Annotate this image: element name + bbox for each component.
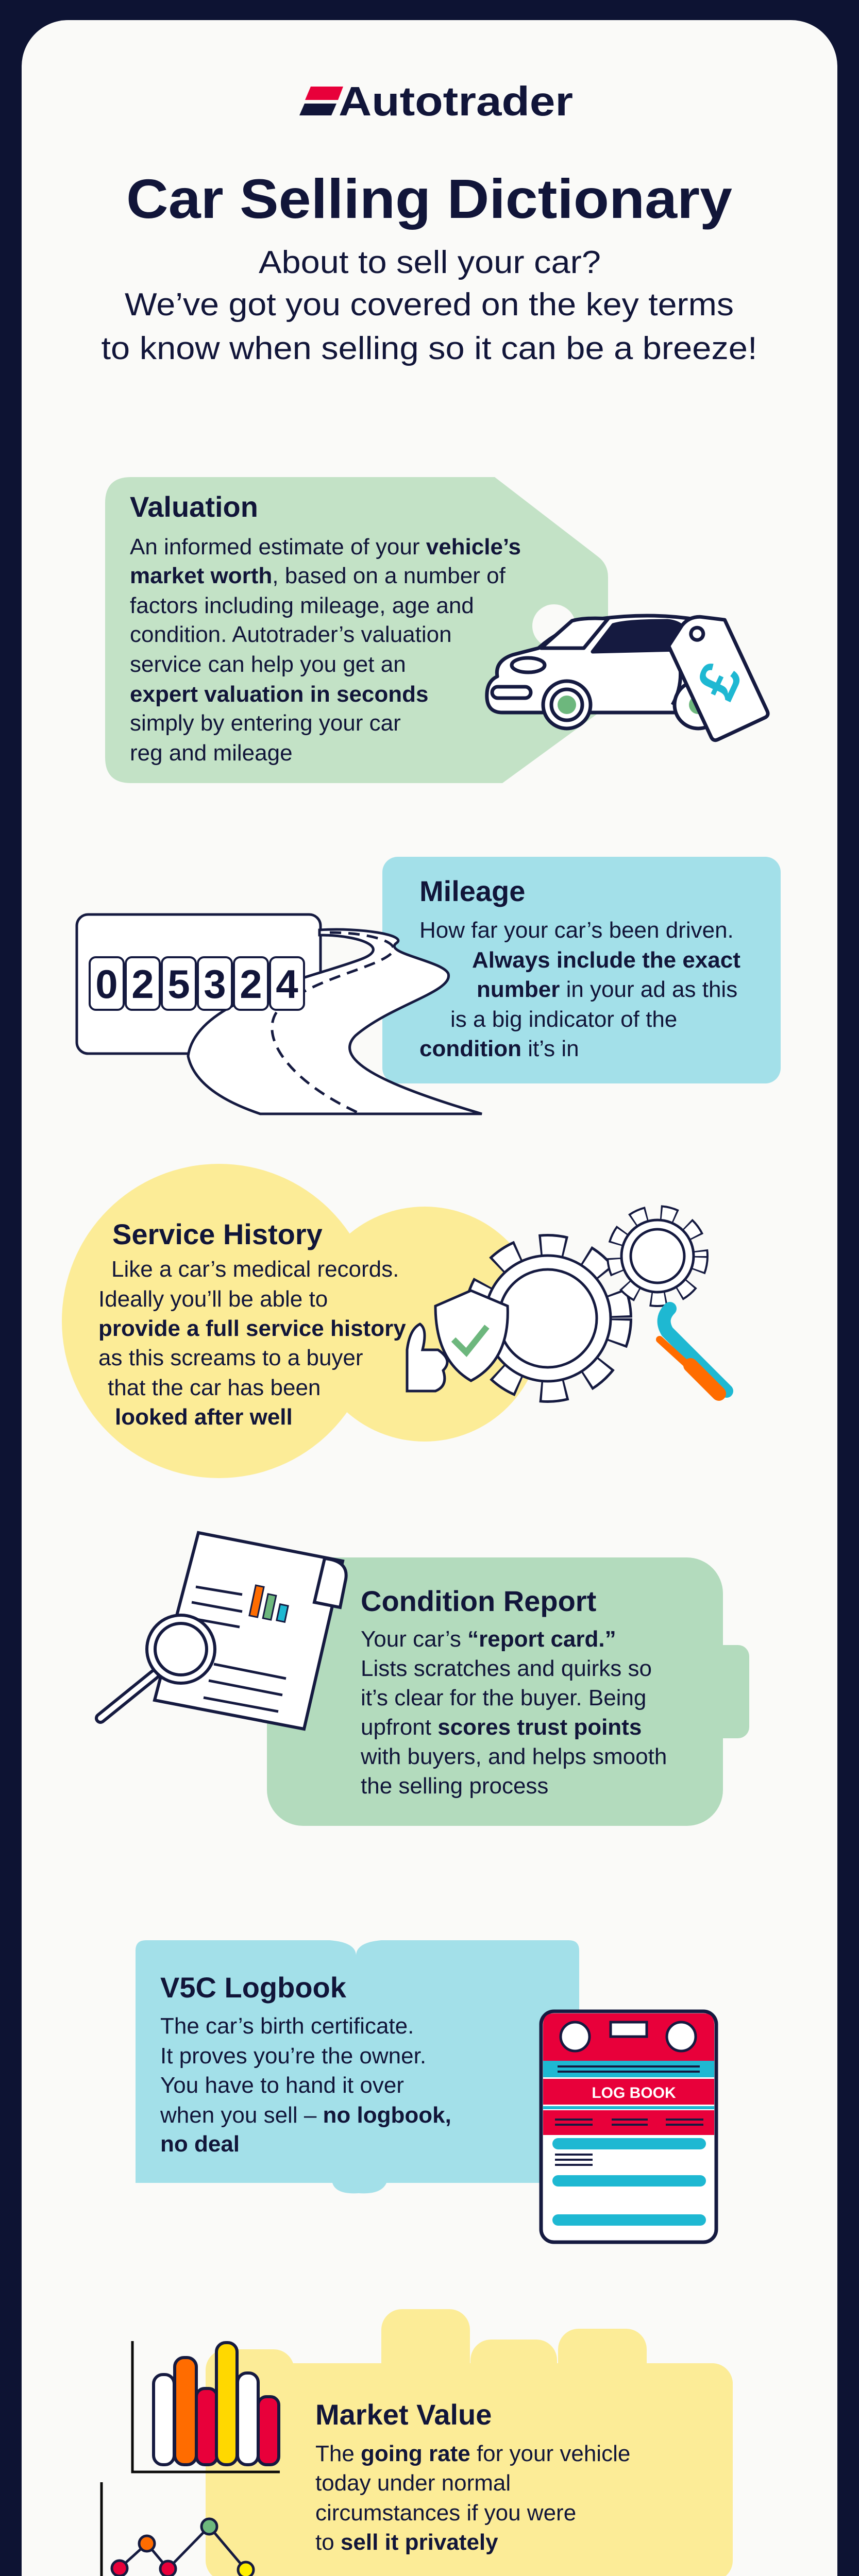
icon: car with price tag <box>487 605 771 742</box>
text: market value body: today under normal <box>315 2470 511 2496</box>
icon: logbook <box>541 2011 716 2242</box>
yellow shape background <box>206 2309 733 2576</box>
icon: logbook: LOG BOOK <box>592 2084 676 2102</box>
text: valuation body: condition. Autotrader’s valuation <box>130 622 452 647</box>
text: valuation body: service can help you get an <box>130 652 406 677</box>
panel: mileage <box>77 857 781 1114</box>
text: market value body: circumstances if you were <box>315 2500 576 2526</box>
text: valuation body: simply by entering your car <box>130 710 401 736</box>
text: valuation body: market worth, based on a number of <box>130 563 506 588</box>
text: mileage body: condition it’s in <box>419 1036 579 1061</box>
text: service history body: Ideally you’ll be able to <box>98 1286 328 1312</box>
heading: valuation: Valuation <box>130 490 258 523</box>
text: service history body: that the car has been <box>108 1375 321 1400</box>
text: valuation body: An informed estimate of your vehicle’s <box>130 534 521 560</box>
text: condition report body: the selling process <box>361 1773 548 1799</box>
text: valuation body: factors including mileage, age and <box>130 593 474 618</box>
title: Car Selling Dictionary <box>126 167 732 230</box>
heading: service history: Service History <box>112 1218 323 1250</box>
text: mileage body: number in your ad as this <box>477 977 737 1002</box>
text: v5c body: You have to hand it over <box>160 2073 404 2098</box>
icon: odometer and road: 2 <box>240 961 262 1007</box>
subtitle: We’ve got you covered on the key terms <box>125 287 734 323</box>
text: market value body <box>315 2441 630 2555</box>
icon: bar chart <box>132 2341 280 2472</box>
text: service history body: Like a car’s medical records. <box>111 1257 399 1282</box>
icon: line chart <box>102 2482 254 2576</box>
blue box background <box>136 1940 579 2193</box>
icon: odometer and road: 5 <box>167 961 190 1007</box>
text: mileage body: How far your car’s been driven. <box>419 918 734 943</box>
icon: car with price tag: £ <box>684 653 754 708</box>
text: service history body: as this screams to a buyer <box>98 1345 363 1370</box>
text: condition report body: it’s clear for the buyer. Being <box>361 1685 646 1710</box>
text: condition report body <box>360 1626 667 1799</box>
yellow circles background <box>62 1164 376 1478</box>
icon: document with magnifier <box>100 1533 346 1729</box>
mileage box background <box>382 857 781 1083</box>
icon: odometer and road <box>77 914 482 1114</box>
text: v5c body: no deal <box>160 2131 240 2157</box>
green box background <box>267 1557 723 1826</box>
panel: service history <box>62 1164 727 1478</box>
tag shape background <box>105 477 608 783</box>
text: valuation body: reg and mileage <box>130 740 293 766</box>
text: service history body: looked after well <box>115 1404 293 1430</box>
text: v5c body: when you sell – no logbook, <box>160 2103 451 2128</box>
subtitle: to know when selling so it can be a breeze! <box>101 331 757 366</box>
panel: v5c logbook <box>136 1940 716 2242</box>
text: v5c body: The car’s birth certificate. <box>160 2013 414 2039</box>
panel: condition report <box>100 1533 749 1826</box>
heading: mileage: Mileage <box>419 875 525 907</box>
panel: valuation <box>105 477 771 783</box>
panel: market value <box>102 2309 733 2576</box>
text: valuation body: expert valuation in seconds <box>130 682 429 707</box>
text: valuation body <box>130 534 521 766</box>
text: condition report body: Your car’s “report card.” <box>361 1626 616 1652</box>
icon: odometer and road: 2 <box>131 961 154 1007</box>
subtitle <box>101 245 757 366</box>
subtitle: About to sell your car? <box>259 245 601 280</box>
icon: odometer and road: 4 <box>276 961 298 1007</box>
icon: odometer and road: 0 <box>95 961 118 1007</box>
heading: condition report: Condition Report <box>361 1585 596 1617</box>
text: mileage body: Always include the exact <box>472 947 740 973</box>
text: condition report body: Lists scratches and quirks so <box>361 1656 652 1681</box>
text: v5c body: It proves you’re the owner. <box>160 2043 426 2069</box>
text: condition report body: with buyers, and helps smooth <box>360 1744 667 1769</box>
text: service history body: provide a full service history <box>98 1316 406 1341</box>
text: mileage body <box>419 918 740 1061</box>
text: v5c body <box>160 2013 451 2157</box>
heading: market value: Market Value <box>315 2398 492 2431</box>
icon: gears shield tools <box>407 1214 727 1394</box>
text: mileage body: is a big indicator of the <box>450 1007 677 1032</box>
icon: odometer and road: 3 <box>204 961 226 1007</box>
logo: Autotrader <box>339 78 573 124</box>
text: condition report body: upfront scores trust points <box>361 1715 642 1740</box>
text: market value body: The going rate for your vehicle <box>315 2441 630 2466</box>
text: market value body: to sell it privately <box>315 2530 498 2555</box>
text: service history body <box>98 1257 406 1430</box>
heading: v5c logbook: V5C Logbook <box>160 1971 347 2004</box>
